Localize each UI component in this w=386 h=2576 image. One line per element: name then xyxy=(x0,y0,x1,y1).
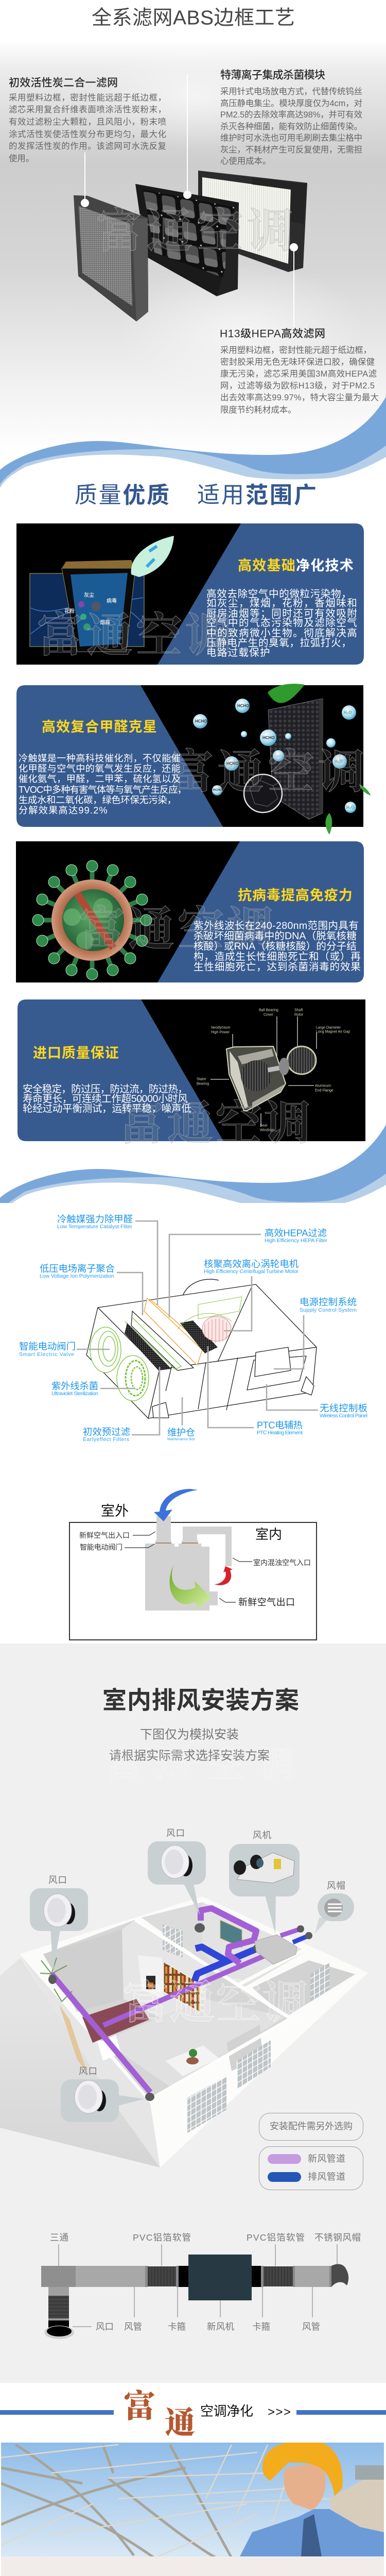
heading: quality and range xyxy=(75,482,317,508)
arrow: green fresh air xyxy=(169,1565,212,1609)
labels: High Efficiency Centrifugal Turbine Motor xyxy=(204,1268,299,1275)
panel: 3D house with ducts xyxy=(0,1896,368,2167)
plant xyxy=(40,1958,72,2002)
labels: 高效HEPA过滤 xyxy=(265,1227,327,1239)
image: catalyst filter with bubbles: HCHO xyxy=(237,704,250,708)
leader lines xyxy=(77,1221,318,1435)
text block: activated carbon: 的发挥活性炭的作用。该滤网可水洗反复 xyxy=(9,142,166,151)
arrow: blue intake xyxy=(154,1489,198,1521)
section divider: brand header xyxy=(0,2380,386,2443)
image: motor exploded view: Aluminum xyxy=(315,1084,331,1088)
machine: fan housing behind xyxy=(183,1279,219,1296)
labels: 电源控制系统 xyxy=(300,1296,357,1308)
panel: indoor installation background xyxy=(0,1643,386,2383)
image: motor exploded view: Long Magnet Air Gap xyxy=(316,1030,350,1033)
image: motor exploded view: End Flange xyxy=(315,1089,334,1092)
text block: ion module: 维护时可水洗也可用毛刷刷去集尘格中 xyxy=(220,133,362,143)
labels: 无线控制板 xyxy=(320,1402,367,1414)
text block: ion module: 杀灭各种细菌，能有效防止细菌传染。 xyxy=(220,122,362,131)
labels: Low Temperature Catalyst Fliter xyxy=(57,1224,133,1230)
labels: 不锈钢风帽 xyxy=(314,2232,361,2243)
labels: Maintenance Box xyxy=(167,1437,196,1442)
labels xyxy=(79,1503,311,1607)
callout: vent bottom: 风口 xyxy=(79,2066,97,2076)
legend: duct colours: 新风管道 xyxy=(308,2154,345,2164)
watermark: 富通空调 xyxy=(96,193,293,260)
image: catalyst filter with bubbles: HCHO xyxy=(226,761,239,766)
labels: PTC电辅热 xyxy=(257,1420,303,1430)
labels: 低压电场离子聚合 xyxy=(40,1263,115,1274)
labels: PTC Heating Element xyxy=(257,1430,303,1436)
card body xyxy=(23,1083,192,1114)
card title: 高效复合甲醛克星 xyxy=(42,719,157,735)
image: motor exploded view: Bearing xyxy=(197,1082,209,1086)
photo: steel roof with engineer xyxy=(1,2441,384,2558)
image: motor exploded view: Seal xyxy=(260,1124,267,1127)
legend: duct colours xyxy=(259,2146,363,2190)
labels: 维护仓 xyxy=(167,1427,195,1437)
leader lines xyxy=(59,2244,337,2327)
ducts: blue exhaust xyxy=(195,1936,309,1981)
filter: activated carbon front xyxy=(74,195,148,321)
vertical branch xyxy=(48,2287,69,2296)
text block: activated carbon: 滤芯采用复合纤维表面喷涂活性炭粉末， xyxy=(9,105,166,114)
furniture: bedroom window and painting xyxy=(163,1924,183,1958)
text block: ion module: 心使用成本。 xyxy=(220,157,271,166)
leader lines xyxy=(125,1532,252,1602)
machine: smart valves xyxy=(90,1327,149,1401)
pipes xyxy=(41,2266,76,2287)
panel: headline band xyxy=(1,2556,384,2576)
image: purification module: 烟霾 xyxy=(100,619,110,625)
card title: 高效基础净化技术 xyxy=(238,558,354,573)
panel: filter background gradient xyxy=(0,40,386,457)
image: catalyst filter with bubbles: H₂O xyxy=(335,759,343,764)
labels: 室外 xyxy=(101,1503,129,1519)
card body: 杀破坏细菌病毒中的DNA（脱氧核糖 xyxy=(194,930,357,942)
panel: card 2 formaldehyde: 富通空调 xyxy=(167,734,364,801)
labels: 卡箍 xyxy=(252,2321,270,2332)
card body: 紫外线波长在240-280nm范围内具有 xyxy=(194,920,359,931)
image: motor exploded view: Neodymium xyxy=(211,1026,231,1029)
heading: indoor exhaust installation: 下图仅为模拟安装 xyxy=(140,1728,239,1741)
front windows xyxy=(237,2040,271,2089)
image: motor exploded view: Large Diameter xyxy=(316,1026,341,1029)
card body: 生性细胞死亡，达到杀菌消毒的效果 xyxy=(194,961,361,973)
labels: Ultraviolet Sterilization xyxy=(51,1391,98,1397)
card body: 核酸）或RNA（核糖核酸）的分子结 xyxy=(194,941,357,952)
card body: 生成水和二氧化碳，绿色环保无污染， xyxy=(19,795,177,805)
ducts: purple fresh air xyxy=(51,1908,301,2092)
text block: ion module: 特薄离子集成杀菌模块 xyxy=(220,69,325,81)
card body: 催化氨气，甲醛，二甲苯，硫化氢以及 xyxy=(19,774,181,784)
image: catalyst filter with bubbles: HCHO xyxy=(213,789,222,792)
ground shadow xyxy=(0,1958,160,2167)
card body: 寿命更长，可连续工作超50000小时风 xyxy=(23,1093,188,1105)
labels: Supply Control System xyxy=(300,1307,357,1313)
card body xyxy=(206,588,358,658)
card title: 进口质量保证 xyxy=(33,1045,119,1061)
text block: activated carbon xyxy=(9,77,166,163)
room outline xyxy=(69,1522,317,1640)
card body: 如灰尘，煤烟，花粉，香烟味和 xyxy=(206,598,358,609)
text block: activated carbon: 初效活性炭二合一滤网 xyxy=(9,77,118,89)
image: purification module: 病毒 xyxy=(107,598,117,604)
image: catalyst filter with bubbles: HCHO xyxy=(195,719,207,723)
heading: indoor exhaust installation: 请根据实际需求选择安装方案 xyxy=(109,1749,270,1763)
labels: 三通 xyxy=(50,2232,68,2243)
card body: 轮经过动平衡测试，运转平稳，噪声低 xyxy=(23,1103,192,1114)
card body: 构，造成生长性细胞死亡和（或）再 xyxy=(194,951,361,962)
watermark: 富通空调 xyxy=(123,1967,308,2031)
machine: dark pre-filter mesh xyxy=(125,1323,171,1370)
labels: PVC铝箔软管 xyxy=(133,2232,191,2243)
panel: card 2 formaldehyde xyxy=(16,684,371,835)
heading: quality and range: 适用范围广 xyxy=(197,482,317,508)
image: purification module: 花粉 xyxy=(64,608,75,614)
labels: 风管 xyxy=(302,2321,320,2332)
text block: activated carbon: 使用。 xyxy=(9,154,34,163)
section divider: brand header: >>> xyxy=(268,2405,291,2419)
image: motor exploded view: Shaft xyxy=(294,1009,303,1012)
callout: vent bottom xyxy=(61,2066,145,2122)
image: motor exploded view: Cover xyxy=(264,1013,273,1017)
legend: accessories note xyxy=(259,2113,363,2140)
panel: machine structure diagram xyxy=(19,1214,367,1443)
callout: vent top: 风口 xyxy=(166,1828,185,1838)
callout: vent top xyxy=(148,1828,206,1915)
text block: H13 HEPA: 出去效率高达99.97%，特大容尘量为最大 xyxy=(220,393,379,402)
fan unit xyxy=(255,1935,297,1964)
image: catalyst filter with bubbles: HCHO xyxy=(262,736,275,740)
labels: 风口 xyxy=(96,2321,114,2332)
heading: indoor exhaust installation: 室内排风安装方案 xyxy=(102,1687,299,1714)
text block: activated carbon: 涂式活性炭使活性炭分布更均匀，最大化 xyxy=(9,130,166,139)
labels: 新鲜空气出入口 xyxy=(79,1531,130,1539)
heading: indoor exhaust installation: 富通空调 xyxy=(106,1736,295,1788)
callout: fan xyxy=(229,1830,300,1934)
labels: Smart Electric Valve xyxy=(19,1351,74,1358)
text block: H13 HEPA xyxy=(220,328,379,415)
heading: indoor exhaust installation xyxy=(102,1687,299,1788)
image: purification module xyxy=(30,536,174,652)
machine: filter stack xyxy=(125,1298,206,1370)
text block: H13 HEPA: 康无污染，滤芯采用美国3M高效HEPA滤 xyxy=(220,369,377,379)
legend: duct colours: 排风管道 xyxy=(308,2172,345,2182)
labels xyxy=(19,1214,367,1443)
legend: accessories note: 安装配件需另外选购 xyxy=(270,2121,353,2131)
machine: pink turbine xyxy=(202,1316,231,1341)
image: motor exploded view: High Power xyxy=(211,1030,230,1035)
labels: 核聚高效离心涡轮电机 xyxy=(204,1258,299,1269)
panel: card 3 antivirus: 富通空调 xyxy=(79,891,273,958)
section divider: brand header: 富 xyxy=(124,2380,155,2427)
image: catalyst filter with bubbles xyxy=(193,684,371,835)
card body: TVOC中多种有害气体等与氧气产生反应， xyxy=(19,785,187,795)
labels: 风管 xyxy=(124,2321,142,2332)
panel: card 4 imported quality xyxy=(17,999,365,1153)
image: motor exploded view: Ball Bearing xyxy=(259,1009,278,1012)
panel: card 4 imported quality: 富通空调 xyxy=(118,1086,310,1153)
machine: dark catalyst bar xyxy=(180,1320,218,1353)
text block: ion module: 采用针式电场放电方式，代替传统钨丝 xyxy=(220,87,362,96)
labels: 初效预过滤 xyxy=(83,1426,130,1437)
labels: 室内 xyxy=(255,1527,282,1542)
panel: air flow schematic xyxy=(69,1489,317,1640)
wall cap xyxy=(331,2264,348,2287)
duct vents xyxy=(48,1923,312,2101)
labels: High Efficiency HEPA Filter xyxy=(265,1238,327,1244)
decorative blue wave 2 xyxy=(0,1125,386,1203)
labels: Wireless Control Panel xyxy=(320,1413,367,1419)
diagram: duct assembly xyxy=(41,2232,361,2339)
card body: 电路过载保护 xyxy=(206,647,271,658)
labels: Earlyeffect Filters xyxy=(83,1436,129,1443)
labels: 智能电动阀门 xyxy=(80,1543,122,1551)
unit and ducts xyxy=(145,1516,232,1611)
text block: ion module xyxy=(220,69,362,166)
filter: HEPA back xyxy=(198,171,307,272)
labels: 冷触媒强力除甲醛 xyxy=(57,1214,133,1224)
image: motor exploded view xyxy=(197,1009,350,1132)
panel: card 3 antivirus xyxy=(16,841,364,982)
card body: 高效去除空气中的微粒污染物， xyxy=(206,588,352,600)
furniture: carpet and fireplace xyxy=(82,1999,149,2043)
labels: 室内混浊空气入口 xyxy=(253,1558,311,1567)
door xyxy=(59,2005,87,2074)
title: filter frame process: 全系滤网ABS边框工艺 xyxy=(92,7,295,29)
callout marker lines xyxy=(85,74,294,327)
labels: PVC铝箔软管 xyxy=(247,2232,305,2243)
room floors xyxy=(43,1902,355,2099)
text block: H13 HEPA: 网，过滤等级为欧标H13级，对于PM2.5 xyxy=(220,381,375,391)
callout: wall cap xyxy=(315,1880,354,1934)
panel: three filter illustration xyxy=(74,74,307,327)
card body: 压静电产生的臭氧，拉弧打火， xyxy=(206,637,352,649)
callout: vent left: 风口 xyxy=(48,1875,67,1885)
card body: 空气中的气态污染物及滤除空气 xyxy=(206,617,358,629)
text block: H13 HEPA: H13级HEPA高效滤网 xyxy=(220,328,325,340)
panel: card 1 base purification: 富通空调 xyxy=(37,598,232,665)
image: purification module: 灰尘 xyxy=(84,591,94,599)
text block: H13 HEPA: 限度节约耗材成本。 xyxy=(220,405,296,415)
decorative blue wave xyxy=(0,397,386,488)
text block: ion module: 灰尘，不耗材产生可反复使用，无需担 xyxy=(220,145,362,155)
callout: fan: 风机 xyxy=(253,1830,272,1840)
text block: ion module: 高压静电集尘。模块厚度仅为4cm，对 xyxy=(220,99,362,108)
labels: 新鲜空气出口 xyxy=(238,1597,295,1607)
text block: activated carbon: 有效过滤粉尘大颗粒，且风阻小，粉末喷 xyxy=(9,117,166,127)
card body: 化甲醛与空气中的氧气发生反应，还能 xyxy=(19,764,181,774)
callout: vent left xyxy=(30,1875,88,1971)
image: motor exploded view: Stator xyxy=(197,1078,206,1081)
image: catalyst filter with bubbles: H₂O xyxy=(346,805,355,810)
labels: 紫外线杀菌 xyxy=(51,1381,98,1391)
panel: card 1 base purification xyxy=(16,523,364,665)
filter: ion module middle xyxy=(135,184,239,296)
text block: H13 HEPA: 密封胶采用无色无味环保进口胶，确保健 xyxy=(220,358,375,367)
card body: 分解效果高达99.2% xyxy=(19,805,108,816)
card body: 安全稳定，防过压，防过流，防过热， xyxy=(23,1083,188,1095)
image: catalyst filter with bubbles: H₂O xyxy=(344,710,352,715)
arrow: red indoor air xyxy=(214,1566,233,1585)
image: motor exploded view: Rotor xyxy=(294,1013,304,1017)
text block: activated carbon: 采用塑料边框，密封性能远超于纸边框， xyxy=(9,93,166,103)
card body: 中的致病微小生物。彻底解决高 xyxy=(206,628,358,639)
house walls xyxy=(20,1896,368,2167)
card title: 抗病毒提高免疫力 xyxy=(238,888,353,903)
worker xyxy=(240,2509,384,2556)
text block: ion module: PM2.5的去除效率高达98%，并可有效 xyxy=(220,110,362,120)
card body: 冷触媒是一种高科技催化剂，不仅能催 xyxy=(19,753,181,764)
labels: 智能电动阀门 xyxy=(19,1341,76,1352)
card body xyxy=(194,920,361,973)
callout: wall cap: 风帽 xyxy=(327,1880,345,1891)
machine: body outline xyxy=(86,1284,317,1418)
image: motor exploded view: Windings xyxy=(260,1128,275,1132)
labels: Low Voltage Ion Polymerization xyxy=(40,1273,114,1279)
image: virus with prohibition sign xyxy=(32,860,152,980)
labels xyxy=(50,2232,361,2332)
heading: quality and range: 质量优质 xyxy=(75,482,169,508)
labels: 新风机 xyxy=(207,2321,235,2332)
labels: 卡箍 xyxy=(168,2321,186,2332)
fresh air unit xyxy=(188,2255,252,2300)
section divider: brand header: 通 xyxy=(165,2398,196,2443)
text block: H13 HEPA: 采用塑料边框，密封性能元超于纸边框， xyxy=(220,346,372,355)
section divider: brand header: 空调净化 xyxy=(200,2403,253,2419)
card body xyxy=(19,753,187,816)
card body: 厨房油烟等；同时还可有效吸附 xyxy=(206,608,358,619)
dividing walls xyxy=(135,1920,305,2099)
